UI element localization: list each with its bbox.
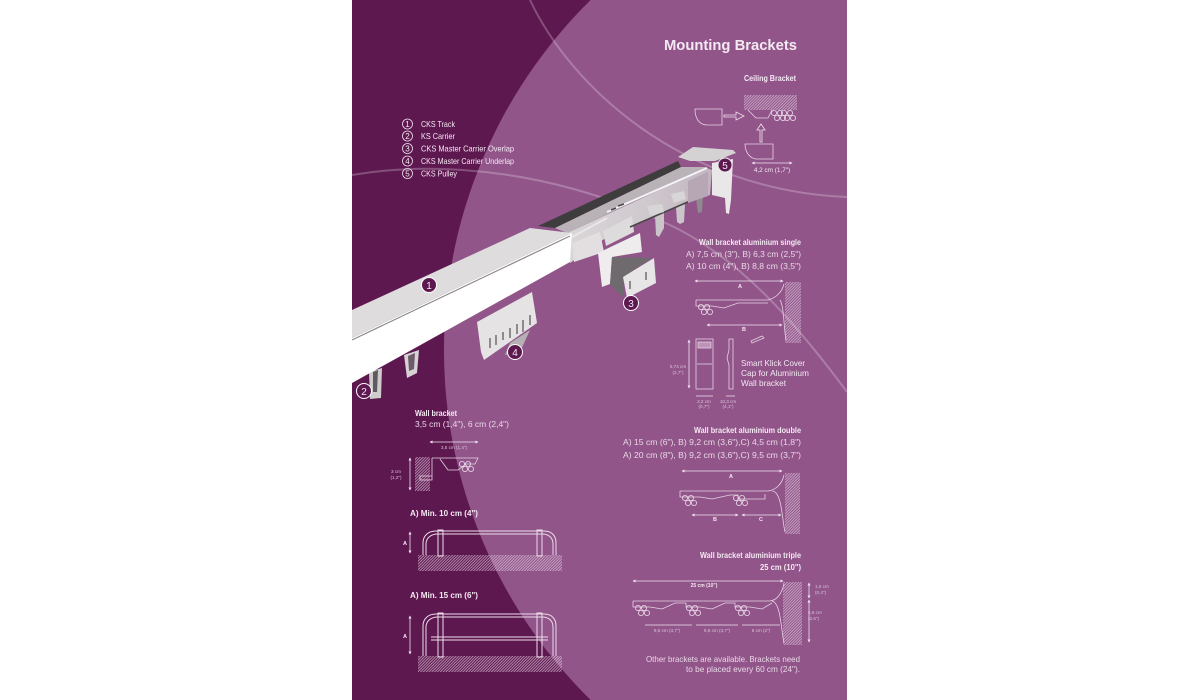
dimension B: B — [742, 327, 746, 333]
legend item 4: CKS Master Carrier Underlap — [421, 156, 514, 166]
track illustration — [352, 147, 736, 399]
legend item 1: CKS Track — [421, 119, 456, 129]
dimensions B and C: C — [759, 517, 763, 523]
legend item 2: KS Carrier — [421, 131, 455, 141]
heading: 25 cm (10") — [760, 563, 801, 572]
side dimensions — [808, 583, 829, 642]
section: min 15 cm — [403, 591, 562, 672]
sizes: A) 10 cm (4"), B) 8,8 cm (3,5") — [686, 261, 801, 271]
heading: Wall bracket aluminium single — [699, 238, 801, 247]
legend item 5: CKS Pulley — [421, 168, 458, 178]
legend item 5 — [402, 168, 458, 178]
wall hatch — [415, 457, 430, 491]
lower dimensions: 9,5 cm (3,7") — [704, 628, 731, 633]
legend item 1: 1 — [405, 120, 410, 129]
number badge 3 — [624, 296, 638, 310]
side dimensions: 1,6 cm — [815, 584, 829, 589]
smart klick caption — [741, 358, 809, 388]
side dimensions: 6,5 cm — [808, 610, 822, 615]
cap width dimensions: (0,7") — [698, 404, 710, 409]
section: wall bracket aluminium double — [623, 426, 802, 534]
dimension A — [403, 616, 410, 654]
number badge 2 — [356, 384, 372, 398]
translucent track section — [538, 161, 712, 263]
lower dimensions — [645, 625, 780, 633]
dimension A — [695, 281, 783, 290]
wall hatch — [785, 473, 800, 534]
section: wall bracket aluminium triple — [633, 551, 829, 674]
dimensions B and C: B — [713, 517, 717, 523]
dimension A: A — [403, 634, 407, 640]
dimension B — [707, 325, 782, 333]
title: Mounting Brackets — [664, 38, 797, 54]
end bracket 5 — [678, 147, 736, 214]
number badge 4: 4 — [512, 348, 518, 359]
cover cap left — [695, 109, 722, 125]
dimension A: A — [738, 284, 742, 290]
wall hatch — [785, 282, 801, 343]
lower dimensions: 9,5 cm (3,7") — [654, 628, 681, 633]
dimension: 4,2 cm (1,7") — [754, 167, 790, 174]
carrier hook 2 — [369, 368, 382, 399]
dimension A: A — [403, 541, 407, 547]
sizes — [623, 437, 801, 460]
legend item 2 — [402, 131, 455, 141]
legend item 2: 2 — [405, 132, 410, 141]
legend item 3: 3 — [405, 144, 410, 154]
cap width dimensions: 10,3 cm — [720, 399, 736, 404]
dimensions B and C — [692, 515, 781, 523]
width dimension: 3,5 cm (1,4") — [441, 445, 468, 450]
dimension A: A — [729, 474, 733, 480]
arrow right — [724, 112, 744, 120]
sizes: 3,5 cm (1,4"), 6 cm (2,4") — [415, 419, 509, 429]
section: wall bracket aluminium single — [670, 238, 809, 409]
cover cap lower — [745, 144, 773, 159]
heading: A) Min. 10 cm (4") — [410, 509, 478, 518]
number badge 1: 1 — [426, 281, 432, 292]
number badge 5: 5 — [722, 161, 728, 172]
number badge 2: 2 — [361, 387, 367, 398]
cap height dimension — [670, 340, 689, 388]
ceiling hatch — [418, 656, 562, 672]
height dimension — [390, 458, 410, 490]
cover cap front — [696, 339, 713, 389]
legend item 3: CKS Master Carrier Overlap — [421, 144, 514, 154]
cap width dimensions: (4,1") — [722, 404, 734, 409]
curtain rail frame — [423, 613, 556, 657]
white track body — [352, 228, 572, 383]
number badge 4 — [508, 344, 522, 360]
carrier hooks behind track — [655, 195, 703, 237]
section: min 10 cm — [403, 509, 562, 571]
bracket profile — [680, 475, 785, 532]
section: ceiling bracket — [695, 74, 797, 174]
ceiling hatch — [418, 555, 562, 571]
wall hatch — [783, 582, 802, 645]
heading: ceiling bracket: Ceiling Bracket — [744, 74, 796, 83]
sizes — [686, 249, 801, 271]
arrow up — [757, 124, 765, 142]
dimension overall: 25 cm (10") — [691, 583, 718, 589]
cover cap side — [727, 339, 733, 389]
number badge 5 — [718, 158, 732, 172]
small arrow — [751, 336, 764, 343]
sizes: A) 7,5 cm (3"), B) 6,3 cm (2,5") — [686, 249, 801, 259]
heading: A) Min. 15 cm (6") — [410, 591, 478, 600]
side dimensions: (0,4") — [815, 590, 827, 595]
bracket profile — [633, 584, 784, 643]
heading: Wall bracket aluminium triple — [700, 551, 801, 560]
large light circle — [444, 0, 847, 700]
side dimensions: (2,6") — [808, 616, 820, 621]
smart klick caption: Cap for Aluminium — [741, 368, 809, 378]
ceiling hatch — [744, 95, 797, 110]
smart klick caption: Smart Klick Cover — [741, 358, 805, 368]
cap height dimension: 6,74 cm — [670, 364, 686, 369]
master carrier underlap 4 — [477, 292, 537, 360]
sizes: A) 20 cm (8"), B) 9,2 cm (3,6"),C) 9,5 cm (3,7") — [623, 450, 801, 460]
height dimension: (1,2") — [390, 475, 402, 480]
note text — [646, 654, 800, 674]
arc: middle curve — [352, 169, 847, 392]
cap height dimension: (2,7") — [672, 370, 684, 375]
legend item 5: 5 — [405, 170, 410, 178]
lower dimensions: 6 cm (2") — [752, 628, 771, 633]
carrier hook — [404, 350, 419, 378]
legend item 1 — [402, 119, 456, 129]
panel: page background — [352, 0, 847, 700]
master carrier overlap 3 — [598, 233, 656, 298]
sizes: A) 15 cm (6"), B) 9,2 cm (3,6"),C) 4,5 cm (1,8") — [623, 437, 801, 447]
smart klick caption: Wall bracket — [741, 378, 787, 388]
dimension A — [403, 532, 410, 553]
arc: upper right curve — [530, 0, 847, 197]
dimension A — [682, 471, 782, 480]
curtain rail frame — [423, 530, 556, 556]
note text: Other brackets are available. Brackets need — [646, 654, 800, 664]
bracket profile — [696, 284, 786, 340]
height dimension: 3 cm — [391, 469, 401, 474]
legend — [402, 119, 514, 178]
legend item 4: 4 — [405, 157, 410, 166]
bracket profile — [420, 458, 478, 480]
cap width dimensions: 2,2 cm — [697, 399, 711, 404]
section: wall bracket — [390, 409, 509, 491]
number badge 1 — [422, 278, 436, 292]
number badge 3: 3 — [628, 299, 634, 310]
heading: Wall bracket aluminium double — [694, 426, 802, 435]
ceiling bracket profile — [748, 110, 796, 121]
note text: to be placed every 60 cm (24"). — [686, 664, 800, 674]
heading: Wall bracket — [415, 409, 457, 418]
heading — [700, 551, 801, 572]
cap width dimensions — [696, 396, 736, 409]
